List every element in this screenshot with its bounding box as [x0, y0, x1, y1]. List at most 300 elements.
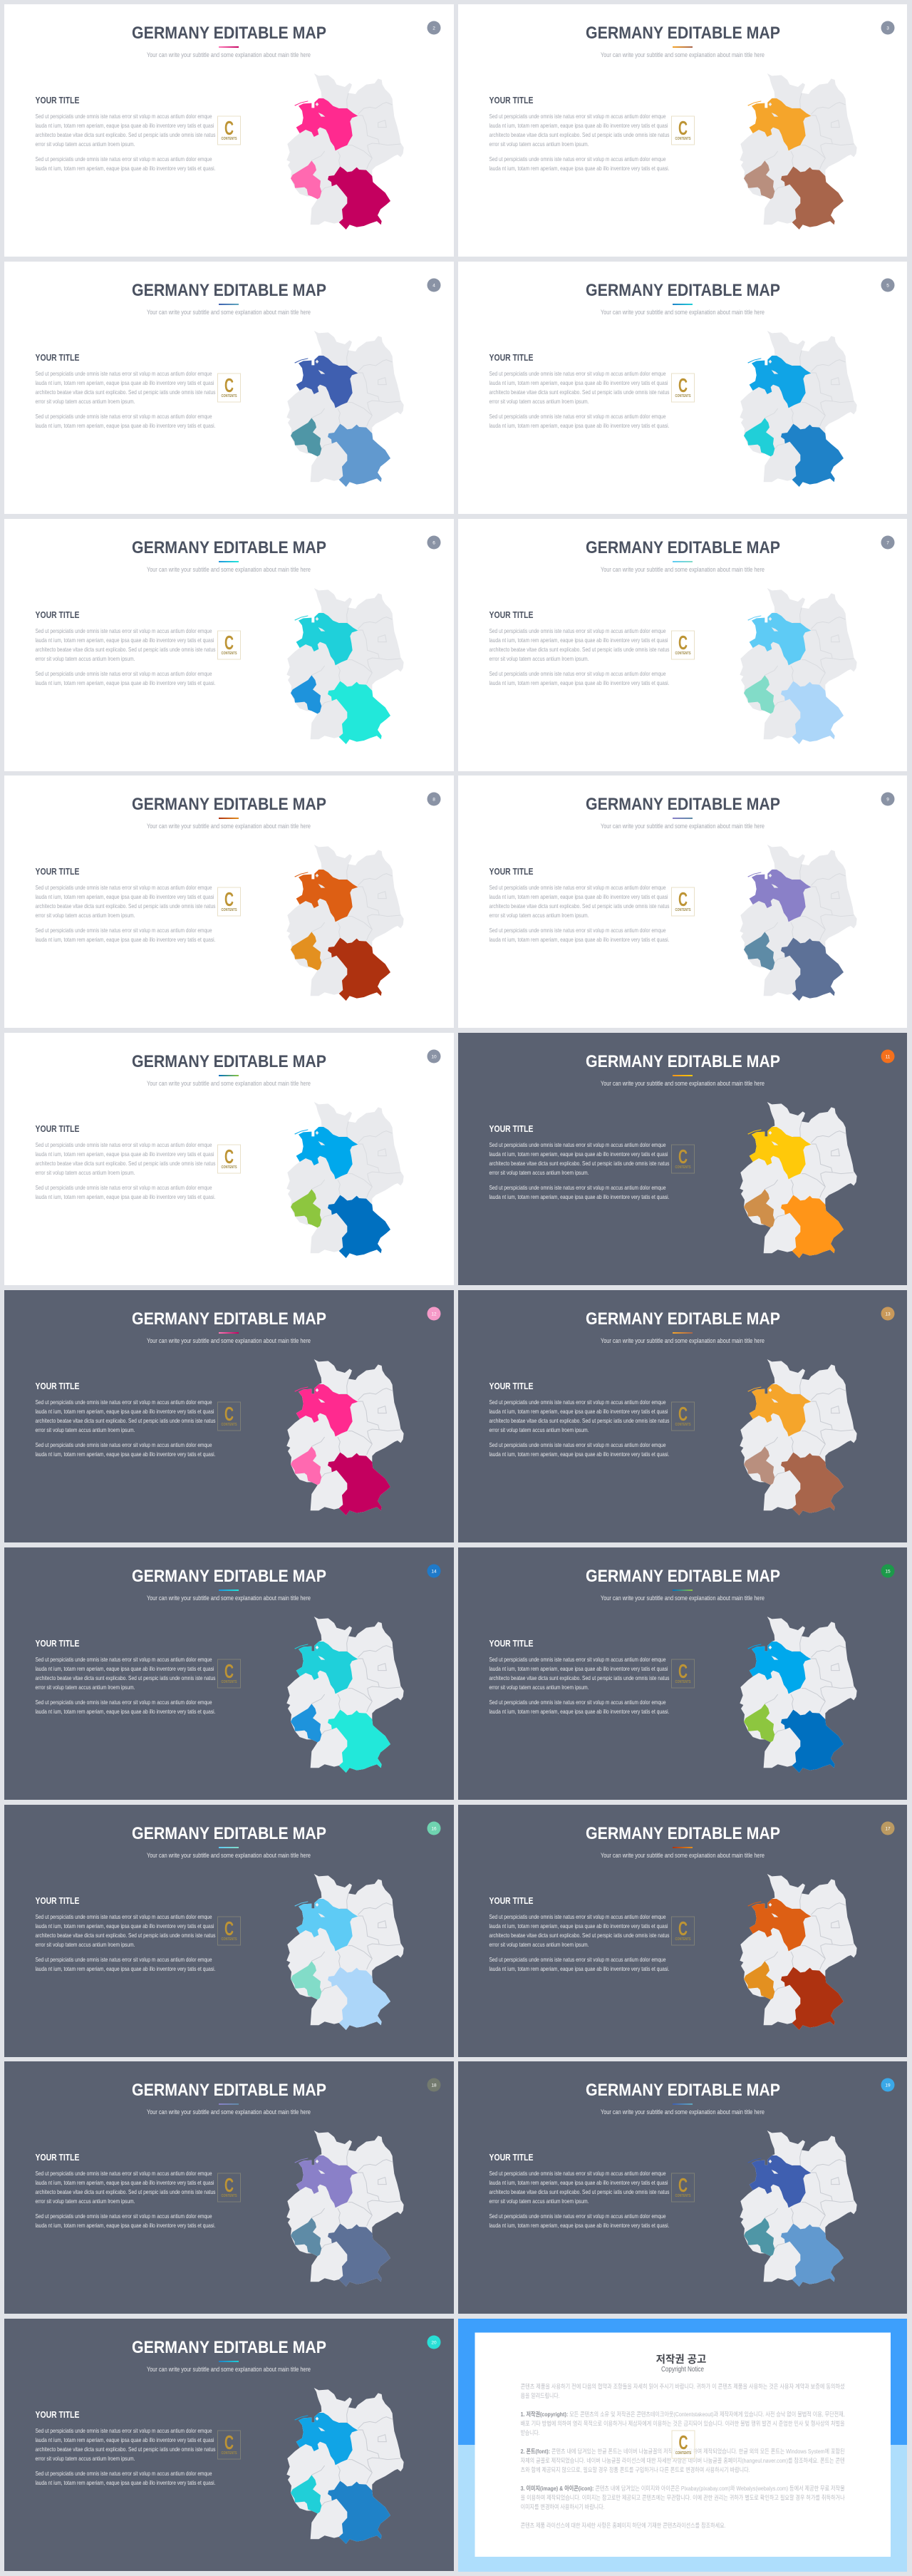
body text: lauda nt ium, totam rem aperiam, eaque ipsa quae ab illo inventore very tatis et quasi. [489, 936, 670, 943]
title underline [219, 1847, 239, 1848]
title: GERMANY EDITABLE MAP [586, 538, 780, 557]
subtitle: Your can write your subtitle and some explanation about main title here [601, 2108, 765, 2116]
map of Germany [740, 845, 857, 1001]
state: Rhineland-Palatinate [291, 1961, 321, 1999]
panel: slide 4 [4, 262, 454, 514]
logo: C [224, 2431, 234, 2453]
state: Rhineland-Palatinate [291, 1704, 321, 1742]
title underline [673, 1847, 693, 1848]
logo: CONTENTS [675, 2194, 691, 2198]
notice body text: 자체의 글꼴로 제작되었습니다. 네이버 나눔글꼴 라이선스에 대한 자세한 사항은 네이버 나눔글꼴 홈페이지(hangeul.naver.com)를 참조하세요. 폰트는 콘텐 [521, 2457, 845, 2464]
state: Rhineland-Palatinate [291, 160, 321, 199]
state: Rhineland-Palatinate [291, 2475, 321, 2513]
page number badge [428, 1822, 440, 1835]
page number badge [881, 2078, 895, 2091]
body text: Sed ut perspiciatis unde omnis iste natus error sit volup m accus antium dolor emque [489, 1699, 666, 1706]
logo: C [224, 374, 234, 396]
state: Lower Saxony [747, 1899, 811, 1951]
body text: error sit volup tatem accus antium lroem ipsum. [36, 1684, 135, 1691]
body text: Sed ut perspiciatis unde omnis iste natus error sit volup m accus antium dolor emque [489, 1141, 666, 1148]
panel: slide 9 [458, 776, 907, 1028]
body text: Sed ut perspiciatis unde omnis iste natus error sit volup m accus antium dolor emque [36, 927, 212, 934]
title: GERMANY EDITABLE MAP [132, 1567, 326, 1586]
panel: slide 20 [4, 2319, 454, 2571]
body text: architecto beatae vitae dicta sunt explicabo. Sed ut perspic iatis unde omnis iste natus [36, 388, 215, 396]
title underline [219, 1332, 239, 1334]
map of Germany [286, 2131, 404, 2287]
body text: error sit volup tatem accus antium lroem ipsum. [489, 398, 589, 405]
body text: error sit volup tatem accus antium lroem ipsum. [36, 1169, 135, 1176]
body text: Sed ut perspiciatis unde omnis iste natus error sit volup m accus antium dolor emque [489, 884, 666, 891]
body text: error sit volup tatem accus antium lroem ipsum. [489, 1426, 589, 1433]
body text: Sed ut perspiciatis unde omnis iste natus error sit volup m accus antium dolor emque [489, 1956, 666, 1963]
logo: CONTENTS [221, 908, 237, 912]
white notice card [475, 2332, 891, 2557]
text heading: YOUR TITLE [489, 1381, 533, 1391]
state: Rhineland-Palatinate [291, 1446, 321, 1485]
subtitle: Your can write your subtitle and some explanation about main title here [601, 1080, 765, 1088]
notice body text: 콘텐츠 제품 라이선스에 대한 자세한 사항은 홈페이지 하단에 기재한 콘텐츠라이선스를 참조하세요. [521, 2522, 726, 2529]
map of Germany [286, 2388, 404, 2544]
body text: Sed ut perspiciatis unde omnis iste natus error sit volup m accus antium dolor emque [489, 670, 666, 677]
title: GERMANY EDITABLE MAP [586, 1824, 780, 1843]
body text: architecto beatae vitae dicta sunt explicabo. Sed ut perspic iatis unde omnis iste natus [36, 1160, 215, 1167]
state: Rhineland-Palatinate [744, 2217, 774, 2256]
body text: lauda nt ium, totam rem aperiam, eaque ipsa quae ab illo inventore very tatis et quasi. [489, 422, 670, 429]
map of Germany [740, 73, 857, 230]
state: Lower Saxony [747, 98, 811, 150]
subtitle: Your can write your subtitle and some explanation about main title here [601, 1337, 765, 1345]
body text: error sit volup tatem accus antium lroem ipsum. [489, 1684, 589, 1691]
body text [489, 1913, 670, 1972]
state: Bavaria [328, 1967, 390, 2030]
body text: lauda nt ium, totam rem aperiam, eaque ipsa quae ab illo inventore very tatis et quasi [489, 1922, 668, 1930]
notice body text: 음을 알려드립니다. [521, 2392, 560, 2399]
state: Bavaria [781, 167, 844, 230]
body text: lauda nt ium, totam rem aperiam, eaque ipsa quae ab illo inventore very tatis et quasi [36, 1665, 214, 1672]
body text: Sed ut perspiciatis unde omnis iste natus error sit volup m accus antium dolor emque [36, 627, 212, 634]
map of Germany [740, 1359, 857, 1515]
body text: lauda nt ium, totam rem aperiam, eaque ipsa quae ab illo inventore very tatis et quasi. [36, 165, 215, 172]
logo: C [678, 374, 688, 396]
page number badge [881, 21, 895, 34]
logo: C [224, 1403, 234, 1425]
body text: error sit volup tatem accus antium lroem ipsum. [36, 655, 135, 662]
body text: lauda nt ium, totam rem aperiam, eaque ipsa quae ab illo inventore very tatis et quasi [489, 379, 668, 386]
body text: Sed ut perspiciatis unde omnis iste natus error sit volup m accus antium dolor emque [36, 370, 212, 377]
body text [489, 884, 670, 943]
map of Germany [286, 73, 404, 230]
page number badge: 9 [886, 797, 889, 803]
body text: Sed ut perspiciatis unde omnis iste natus error sit volup m accus antium dolor emque [36, 113, 212, 120]
body text: lauda nt ium, totam rem aperiam, eaque ipsa quae ab illo inventore very tatis et quasi. [489, 1451, 670, 1458]
logo [218, 1145, 241, 1173]
state: Lower Saxony [747, 1642, 811, 1694]
body text: Sed ut perspiciatis unde omnis iste natus error sit volup m accus antium dolor emque [489, 627, 666, 634]
panel: copyright notice [458, 2319, 907, 2572]
state: Lower Saxony [294, 870, 358, 922]
notice body text: 이미지를 변경하여 사용하시기 바랍니다. [521, 2503, 605, 2510]
page number badge: 16 [431, 1826, 437, 1832]
body text: lauda nt ium, totam rem aperiam, eaque ipsa quae ab illo inventore very tatis et quasi. [489, 1965, 670, 1972]
page number badge [881, 1822, 895, 1835]
text heading: YOUR TITLE [489, 2153, 533, 2163]
body text: Sed ut perspiciatis unde omnis iste natus error sit volup m accus antium dolor emque [36, 1184, 212, 1191]
state: Lower Saxony [294, 1384, 358, 1436]
notice body text: 1. 저작권(copyright): 모든 콘텐츠의 소유 및 저작권은 콘텐츠테이크아웃(Contentstakeout)과 제작자에게 있습니다. 사전 승낙 없이 불법적 이용, 무단전재, [521, 2411, 845, 2418]
logo [218, 1917, 241, 1945]
body text: lauda nt ium, totam rem aperiam, eaque ipsa quae ab illo inventore very tatis et quasi. [489, 1193, 670, 1200]
logo: CONTENTS [221, 2451, 237, 2456]
title underline [219, 304, 239, 305]
body text: lauda nt ium, totam rem aperiam, eaque ipsa quae ab illo inventore very tatis et quasi [36, 1150, 214, 1158]
body text: lauda nt ium, totam rem aperiam, eaque ipsa quae ab illo inventore very tatis et quasi. [489, 679, 670, 686]
body text: architecto beatae vitae dicta sunt explicabo. Sed ut perspic iatis unde omnis iste natus [489, 2188, 670, 2195]
body text: Sed ut perspiciatis unde omnis iste natus error sit volup m accus antium dolor emque [36, 155, 212, 163]
panel: slide 14 [4, 1547, 454, 1800]
notice body text: 받습니다. [521, 2429, 540, 2436]
title: GERMANY EDITABLE MAP [132, 2338, 326, 2357]
logo [218, 373, 241, 402]
title: GERMANY EDITABLE MAP [586, 795, 780, 814]
state: Rhineland-Palatinate [744, 1961, 774, 1999]
logo [671, 1659, 694, 1688]
page number badge: 12 [431, 1312, 437, 1317]
title: GERMANY EDITABLE MAP [132, 2081, 326, 2100]
body text: lauda nt ium, totam rem aperiam, eaque ipsa quae ab illo inventore very tatis et quasi [36, 893, 214, 900]
state: Rhineland-Palatinate [744, 932, 774, 970]
logo: C [678, 117, 688, 139]
logo [671, 1402, 694, 1431]
body text: Sed ut perspiciatis unde omnis iste natus error sit volup m accus antium dolor emque [489, 2170, 666, 2177]
state: Lower Saxony [294, 2413, 358, 2465]
body text: error sit volup tatem accus antium lroem ipsum. [36, 912, 135, 919]
state: Rhineland-Palatinate [291, 932, 321, 970]
logo: CONTENTS [675, 908, 691, 912]
state: Bavaria [328, 938, 390, 1001]
state: Bavaria [328, 424, 390, 487]
body text: Sed ut perspiciatis unde omnis iste natus error sit volup m accus antium dolor emque [36, 1699, 212, 1706]
body text: error sit volup tatem accus antium lroem ipsum. [489, 140, 589, 148]
logo: C [224, 632, 234, 654]
body text: lauda nt ium, totam rem aperiam, eaque ipsa quae ab illo inventore very tatis et quasi [36, 637, 214, 644]
state: Bavaria [781, 1710, 844, 1773]
notice body text: 을 이용하여 제작되었습니다. 이미지는 참고로만 제공되고 콘텐츠에는 무관합니다. 이에 관한 권리는 귀하가 별도로 확인하고 필요할 경우 허가를 취득하거나 [521, 2494, 845, 2501]
subtitle: Your can write your subtitle and some explanation about main title here [147, 823, 311, 830]
page number badge [881, 278, 895, 292]
body text [489, 2170, 670, 2229]
title underline [219, 561, 239, 562]
page number badge [881, 536, 895, 549]
body text: architecto beatae vitae dicta sunt explicabo. Sed ut perspic iatis unde omnis iste natus [36, 902, 215, 910]
subtitle: Your can write your subtitle and some explanation about main title here [601, 566, 765, 574]
body text: Sed ut perspiciatis unde omnis iste natus error sit volup m accus antium dolor emque [489, 1441, 666, 1448]
body text [36, 370, 215, 429]
logo [671, 631, 694, 659]
body text: architecto beatae vitae dicta sunt explicabo. Sed ut perspic iatis unde omnis iste natus [489, 1674, 670, 1681]
body text [489, 1656, 670, 1715]
title underline [673, 46, 693, 48]
body text [36, 1141, 215, 1200]
logo: CONTENTS [221, 1165, 237, 1170]
body text: architecto beatae vitae dicta sunt explicabo. Sed ut perspic iatis unde omnis iste natus [36, 1674, 215, 1681]
body text: Sed ut perspiciatis unde omnis iste natus error sit volup m accus antium dolor emque [36, 1141, 212, 1148]
state: Bavaria [781, 938, 844, 1001]
subtitle: Your can write your subtitle and some explanation about main title here [147, 2108, 311, 2116]
map of Germany [286, 1874, 404, 2030]
body text: lauda nt ium, totam rem aperiam, eaque ipsa quae ab illo inventore very tatis et quasi [489, 1150, 668, 1158]
logo: CONTENTS [675, 1165, 691, 1170]
page number badge: 4 [432, 284, 435, 288]
logo: C [678, 888, 688, 910]
page number badge [428, 1049, 440, 1063]
page number badge: 17 [885, 1826, 891, 1832]
body text: Sed ut perspiciatis unde omnis iste natus error sit volup m accus antium dolor emque [36, 670, 212, 677]
title underline [673, 1332, 693, 1334]
text heading: YOUR TITLE [36, 2153, 80, 2163]
panel: slide 18 [4, 2061, 454, 2314]
logo: CONTENTS [675, 394, 691, 398]
state: Lower Saxony [747, 356, 811, 408]
body text: Sed ut perspiciatis unde omnis iste natus error sit volup m accus antium dolor emque [36, 884, 212, 891]
logo: C [224, 117, 234, 139]
body text: error sit volup tatem accus antium lroem ipsum. [489, 1169, 589, 1176]
page number badge [881, 1049, 895, 1063]
logo: CONTENTS [221, 137, 237, 141]
state: Rhineland-Palatinate [744, 1446, 774, 1485]
panel: slide 11 [458, 1033, 907, 1285]
title: GERMANY EDITABLE MAP [132, 24, 326, 43]
text heading: YOUR TITLE [36, 867, 80, 877]
page number badge [428, 21, 440, 34]
body text: Sed ut perspiciatis unde omnis iste natus error sit volup m accus antium dolor emque [36, 1398, 212, 1406]
body text: architecto beatae vitae dicta sunt explicabo. Sed ut perspic iatis unde omnis iste natus [489, 388, 670, 396]
logo: C [224, 1917, 234, 1939]
state: Bavaria [781, 681, 844, 744]
subtitle: Your can write your subtitle and some explanation about main title here [147, 1080, 311, 1088]
title underline [219, 1075, 239, 1076]
page number badge [428, 278, 440, 292]
logo: CONTENTS [675, 651, 691, 656]
logo: CONTENTS [675, 1680, 691, 1684]
state: Lower Saxony [294, 1127, 358, 1179]
logo [671, 887, 694, 916]
title: GERMANY EDITABLE MAP [132, 1052, 326, 1071]
page number badge [428, 793, 440, 805]
body text: architecto beatae vitae dicta sunt explicabo. Sed ut perspic iatis unde omnis iste natus [489, 902, 670, 910]
notice title: 저작권 공고 [656, 2354, 706, 2366]
panel: slide 16 [4, 1805, 454, 2057]
state: Lower Saxony [747, 1127, 811, 1179]
logo: CONTENTS [221, 651, 237, 656]
text heading: YOUR TITLE [489, 1124, 533, 1134]
body text: Sed ut perspiciatis unde omnis iste natus error sit volup m accus antium dolor emque [489, 927, 666, 934]
logo: C [678, 632, 688, 654]
body text: Sed ut perspiciatis unde omnis iste natus error sit volup m accus antium dolor emque [36, 1956, 212, 1963]
body text: lauda nt ium, totam rem aperiam, eaque ipsa quae ab illo inventore very tatis et quasi. [36, 2479, 215, 2486]
page number badge: 15 [885, 1570, 891, 1574]
page number badge: 19 [885, 2083, 891, 2088]
body text: Sed ut perspiciatis unde omnis iste natus error sit volup m accus antium dolor emque [489, 1656, 666, 1663]
text heading: YOUR TITLE [36, 610, 80, 620]
logo [218, 1402, 241, 1431]
panel: slide 10 [4, 1033, 454, 1285]
map of Germany [740, 1102, 857, 1258]
page number badge: 7 [886, 540, 889, 546]
panel: slide 2 [4, 4, 454, 257]
body text: architecto beatae vitae dicta sunt explicabo. Sed ut perspic iatis unde omnis iste natus [489, 646, 670, 653]
state: Bavaria [781, 2224, 844, 2287]
state: Lower Saxony [294, 356, 358, 408]
map of Germany [286, 1359, 404, 1515]
text heading: YOUR TITLE [489, 867, 533, 877]
body text: lauda nt ium, totam rem aperiam, eaque ipsa quae ab illo inventore very tatis et quasi. [489, 165, 670, 172]
page number badge [428, 2078, 440, 2091]
body text: lauda nt ium, totam rem aperiam, eaque ipsa quae ab illo inventore very tatis et quasi. [36, 1193, 215, 1200]
logo: CONTENTS [675, 1423, 691, 1427]
panel: slide 15 [458, 1547, 907, 1800]
subtitle: Your can write your subtitle and some explanation about main title here [147, 566, 311, 574]
body text: Sed ut perspiciatis unde omnis iste natus error sit volup m accus antium dolor emque [489, 1184, 666, 1191]
panel: slide 8 [4, 776, 454, 1028]
body text [36, 627, 215, 686]
page number badge [881, 1307, 895, 1320]
title underline [673, 1075, 693, 1076]
map of Germany [740, 588, 857, 744]
body text: lauda nt ium, totam rem aperiam, eaque ipsa quae ab illo inventore very tatis et quasi. [36, 1708, 215, 1715]
body text: Sed ut perspiciatis unde omnis iste natus error sit volup m accus antium dolor emque [36, 1441, 212, 1448]
body text: error sit volup tatem accus antium lroem ipsum. [489, 1941, 589, 1948]
body text: lauda nt ium, totam rem aperiam, eaque ipsa quae ab illo inventore very tatis et quasi [36, 379, 214, 386]
body text: lauda nt ium, totam rem aperiam, eaque ipsa quae ab illo inventore very tatis et quasi. [489, 2222, 670, 2229]
logo: CONTENTS [675, 1937, 691, 1942]
state: Lower Saxony [747, 1384, 811, 1436]
logo [671, 1917, 694, 1945]
title underline [673, 304, 693, 305]
body text [36, 113, 215, 172]
page number badge: 2 [432, 26, 435, 31]
state: Bavaria [328, 1453, 390, 1515]
map of Germany [740, 331, 857, 487]
page number badge: 18 [431, 2083, 437, 2088]
state: Bavaria [328, 167, 390, 230]
page number badge: 6 [432, 540, 435, 546]
notice body text: 3. 이미지(image) & 아이콘(icon): 콘텐츠 내에 담겨있는 이미지와 아이콘은 Pixabay(pixabay.com)와 Webalys(webalys.com) 등에서 제공한 무료 저작물 [521, 2485, 845, 2492]
state: Bavaria [781, 1195, 844, 1258]
logo: C [224, 888, 234, 910]
body text [489, 627, 670, 686]
state: Rhineland-Palatinate [291, 418, 321, 456]
logo: CONTENTS [221, 1937, 237, 1942]
title: GERMANY EDITABLE MAP [586, 1309, 780, 1329]
map of Germany [286, 1102, 404, 1258]
body text: error sit volup tatem accus antium lroem ipsum. [489, 2198, 589, 2205]
page number badge: 13 [885, 1312, 891, 1317]
notice body text [521, 2383, 845, 2529]
title underline [219, 818, 239, 819]
title: GERMANY EDITABLE MAP [586, 1567, 780, 1586]
logo: C [678, 1403, 688, 1425]
panel: slide 13 [458, 1290, 907, 1542]
body text: error sit volup tatem accus antium lroem ipsum. [36, 1941, 135, 1948]
body text [36, 1656, 215, 1715]
map of Germany [740, 1617, 857, 1773]
body text: lauda nt ium, totam rem aperiam, eaque ipsa quae ab illo inventore very tatis et quasi [489, 637, 668, 644]
state: Lower Saxony [747, 2155, 811, 2207]
text heading: YOUR TITLE [36, 353, 80, 363]
map of Germany [286, 588, 404, 744]
text heading: YOUR TITLE [489, 353, 533, 363]
text heading: YOUR TITLE [489, 610, 533, 620]
text heading: YOUR TITLE [36, 96, 80, 105]
state: Lower Saxony [294, 1642, 358, 1694]
body text: lauda nt ium, totam rem aperiam, eaque ipsa quae ab illo inventore very tatis et quasi [36, 2179, 214, 2186]
page number badge: 8 [432, 797, 435, 803]
state: Lower Saxony [294, 1899, 358, 1951]
title underline [673, 1590, 693, 1591]
logo: CONTENTS [221, 394, 237, 398]
state: Rhineland-Palatinate [744, 160, 774, 199]
body text: lauda nt ium, totam rem aperiam, eaque ipsa quae ab illo inventore very tatis et quasi [36, 2436, 214, 2443]
logo [671, 116, 694, 145]
subtitle: Your can write your subtitle and some explanation about main title here [601, 1594, 765, 1602]
subtitle: Your can write your subtitle and some explanation about main title here [147, 1337, 311, 1345]
body text: lauda nt ium, totam rem aperiam, eaque ipsa quae ab illo inventore very tatis et quasi [36, 122, 214, 129]
body text: architecto beatae vitae dicta sunt explicabo. Sed ut perspic iatis unde omnis iste natus [489, 131, 670, 138]
body text: architecto beatae vitae dicta sunt explicabo. Sed ut perspic iatis unde omnis iste natus [36, 131, 215, 138]
panel: slide 12 [4, 1290, 454, 1542]
subtitle: Your can write your subtitle and some explanation about main title here [147, 51, 311, 59]
body text: architecto beatae vitae dicta sunt explicabo. Sed ut perspic iatis unde omnis iste natus [36, 2188, 215, 2195]
state: Lower Saxony [294, 613, 358, 665]
body text: Sed ut perspiciatis unde omnis iste natus error sit volup m accus antium dolor emque [489, 155, 666, 163]
subtitle: Your can write your subtitle and some explanation about main title here [601, 823, 765, 830]
logo: C [678, 1917, 688, 1939]
body text [489, 370, 670, 429]
panel: slide 19 [458, 2061, 907, 2314]
body text: Sed ut perspiciatis unde omnis iste natus error sit volup m accus antium dolor emque [36, 1656, 212, 1663]
state: Lower Saxony [294, 98, 358, 150]
title: GERMANY EDITABLE MAP [586, 281, 780, 300]
page number badge: 5 [886, 284, 889, 288]
state: Rhineland-Palatinate [744, 675, 774, 713]
logo: C [224, 1145, 234, 1168]
title: GERMANY EDITABLE MAP [586, 1052, 780, 1071]
state: Rhineland-Palatinate [744, 1189, 774, 1227]
text heading: YOUR TITLE [36, 2410, 80, 2420]
state: Lower Saxony [294, 2155, 358, 2207]
state: Bavaria [328, 681, 390, 744]
body text: Sed ut perspiciatis unde omnis iste natus error sit volup m accus antium dolor emque [489, 1913, 666, 1920]
state: Bavaria [328, 2481, 390, 2544]
body text: error sit volup tatem accus antium lroem ipsum. [489, 912, 589, 919]
text heading: YOUR TITLE [36, 1639, 80, 1649]
subtitle: Your can write your subtitle and some explanation about main title here [147, 1594, 311, 1602]
logo: C [224, 2174, 234, 2196]
subtitle: Your can write your subtitle and some explanation about main title here [601, 51, 765, 59]
subtitle: Your can write your subtitle and some explanation about main title here [601, 309, 765, 316]
logo [218, 2173, 241, 2202]
notice body text: 2. 폰트(font): 콘텐츠 내에 담겨있는 한글 폰트는 네이버 나눔글꼴의 저작권을 이용하여 제작되었습니다. 한글 외의 모든 폰트는 Windows System에 포함된 [521, 2448, 845, 2455]
map of Germany [286, 845, 404, 1001]
page number badge: 14 [431, 1570, 437, 1574]
title: GERMANY EDITABLE MAP [586, 24, 780, 43]
page number badge: 11 [886, 1055, 891, 1059]
body text [489, 113, 670, 172]
title: GERMANY EDITABLE MAP [132, 538, 326, 557]
body text [36, 884, 215, 943]
state: Bavaria [328, 2224, 390, 2287]
